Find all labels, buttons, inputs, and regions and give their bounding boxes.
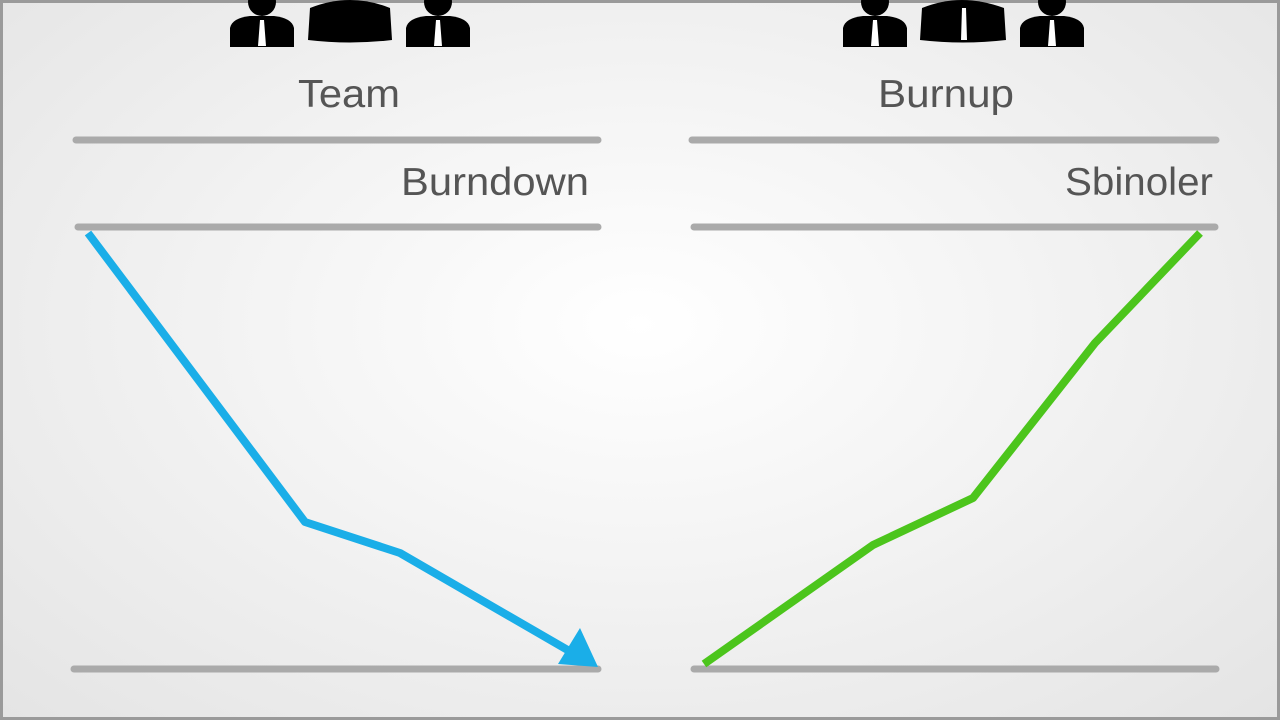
label: Burndown: Burndown: [401, 161, 589, 204]
heading: Team: Team: [298, 73, 400, 116]
chart: burndown line: [88, 233, 598, 667]
icon: team right: [843, 0, 1084, 47]
label: Sbinoler: Sbinoler: [1065, 161, 1213, 204]
chart: burnup line: [704, 233, 1200, 664]
icon: team left: [230, 0, 470, 47]
heading: Burnup: Burnup: [878, 73, 1014, 116]
